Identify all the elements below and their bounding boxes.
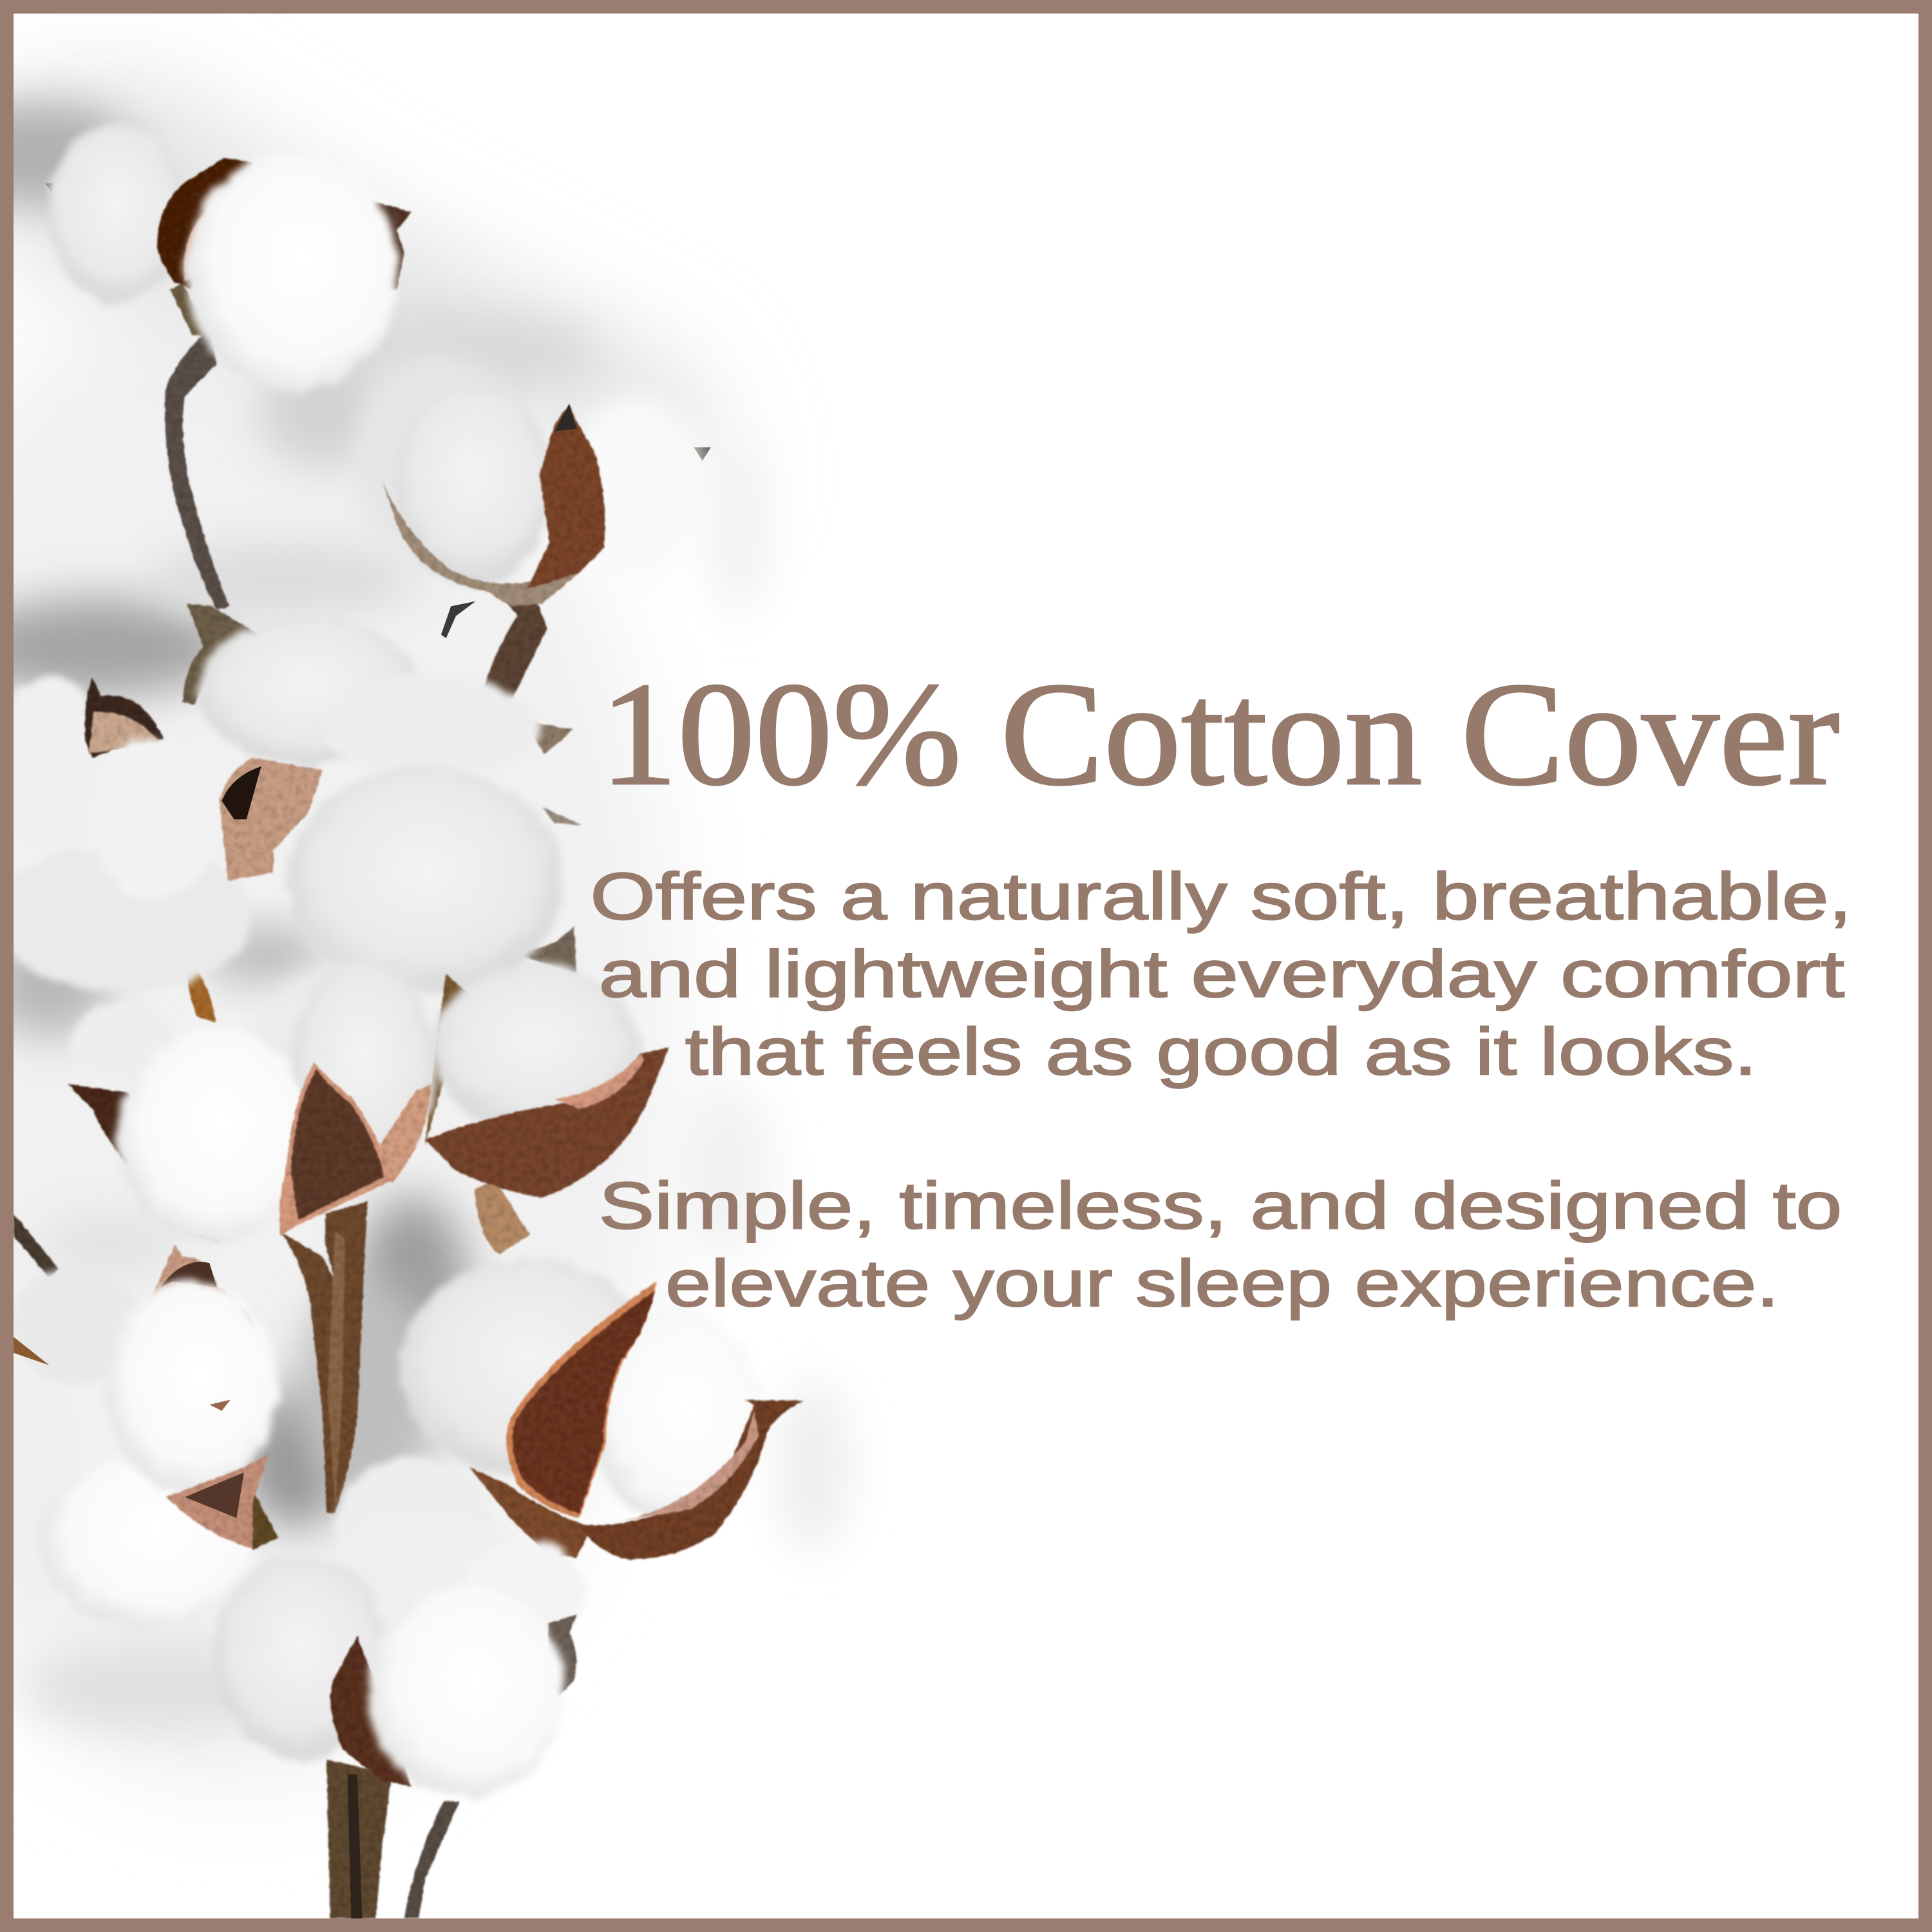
boll: right lower [401, 1259, 803, 1559]
soft grey shadows [0, 74, 850, 1786]
cotton branch photo [0, 74, 850, 1918]
small husk tips [46, 182, 711, 1023]
paragraph: natural comfort: and lightweight everyday comfort [599, 936, 1844, 1011]
boll: right upper [425, 963, 669, 1255]
boll: bottom [213, 1457, 585, 1797]
title: 100% Cotton Cover [600, 652, 1840, 816]
boll: upper right [351, 354, 706, 606]
boll: top [48, 122, 412, 392]
paragraph: natural comfort [590, 858, 1852, 1088]
paragraph: natural comfort: Offers a naturally soft, breathable, [590, 858, 1852, 933]
paragraph: timeless design [599, 1168, 1842, 1320]
paragraph: timeless design: elevate your sleep experience. [665, 1245, 1779, 1320]
paragraph: timeless design: Simple, timeless, and designed to [599, 1168, 1842, 1243]
paragraph: natural comfort: that feels as good as it looks. [685, 1014, 1757, 1088]
stems [14, 283, 547, 1918]
boll: lower left cluster [0, 1244, 278, 1629]
boll: centre large [68, 958, 480, 1242]
cotton cluster: middle [0, 616, 563, 1115]
